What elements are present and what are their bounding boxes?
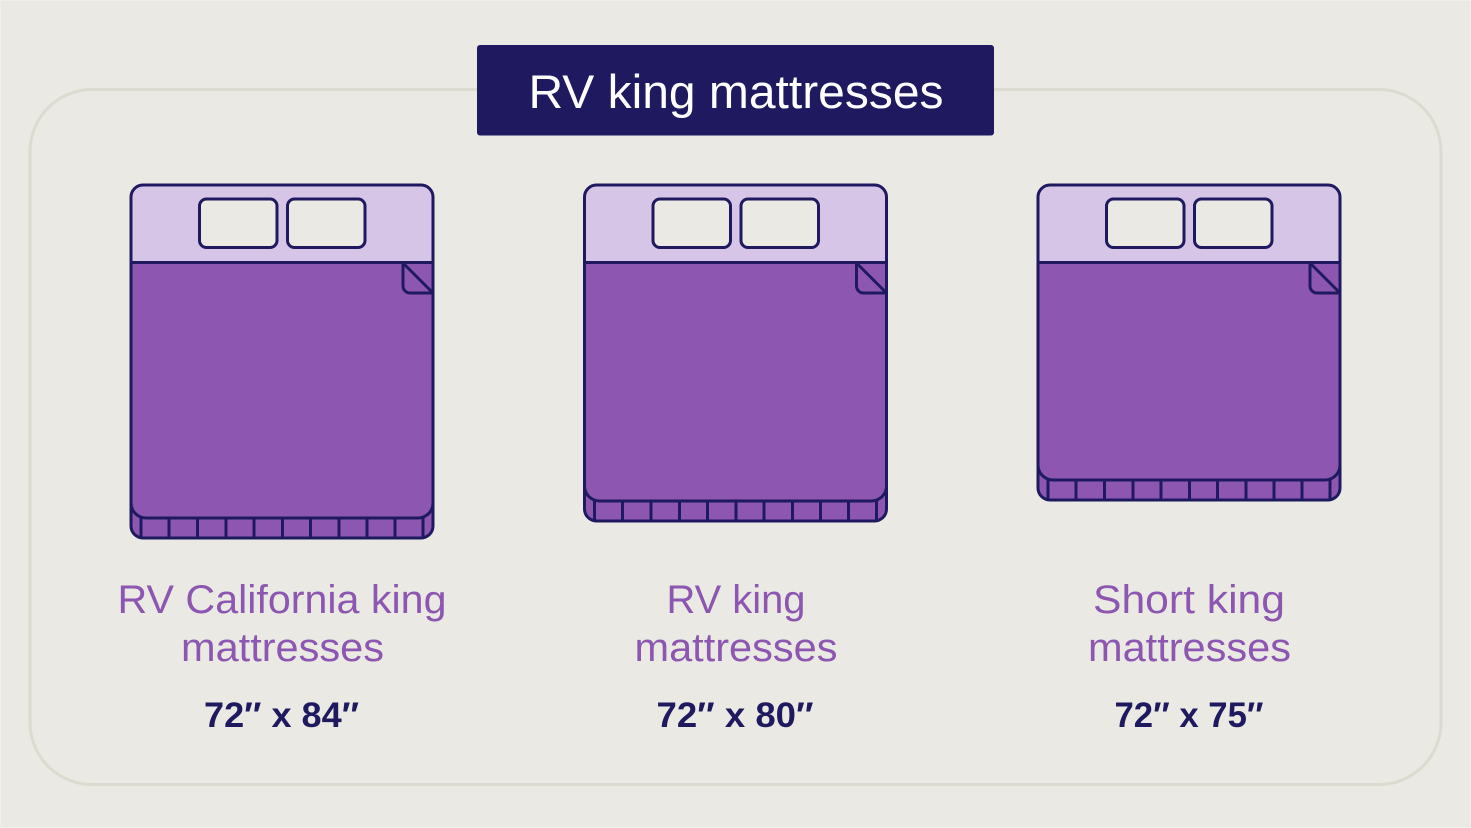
bed: RV king — [584, 185, 886, 521]
title banner — [477, 45, 994, 136]
label: RV California king: mattresses — [181, 626, 384, 670]
label: Short king: Short king — [1093, 578, 1285, 622]
bed: Short king — [1038, 185, 1340, 500]
label: RV California king: RV California king — [118, 578, 446, 622]
label: RV California king — [118, 578, 446, 670]
size: 72 x 75: 72″ x 75″ — [1114, 696, 1264, 735]
label: Short king: mattresses — [1088, 626, 1291, 670]
size: 72 x 80: 72″ x 80″ — [656, 696, 814, 735]
title banner: RV king mattresses — [528, 65, 944, 118]
size: 72 x 84: 72″ x 84″ — [204, 696, 359, 735]
label: RV king — [634, 578, 838, 670]
label: RV king: RV king — [666, 578, 806, 622]
label: RV king: mattresses — [634, 626, 838, 670]
label: Short king — [1088, 578, 1291, 670]
bed: RV California king — [131, 185, 433, 538]
